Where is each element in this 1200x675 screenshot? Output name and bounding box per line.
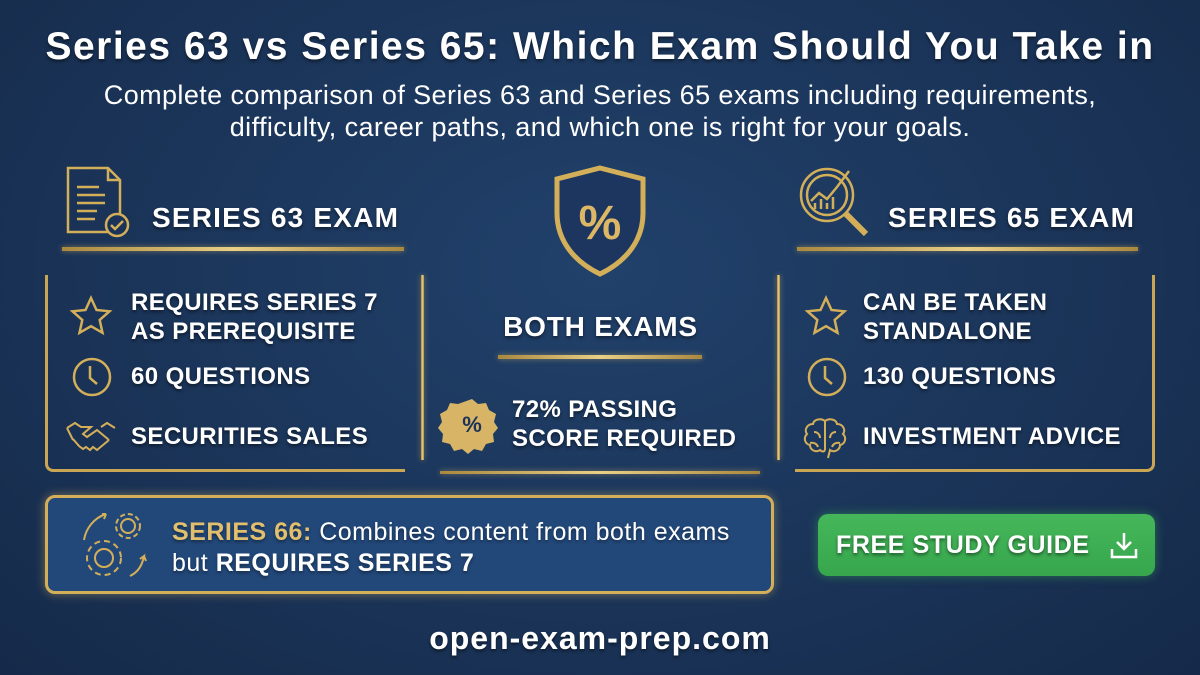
item: investment advice (804, 418, 1121, 458)
text: series 66 note: but REQUIRES SERIES 7 (172, 549, 474, 577)
panel: both exams (438, 165, 762, 478)
heading: series 65 exam: SERIES 65 EXAM (888, 202, 1135, 233)
icon: download (1110, 533, 1138, 558)
item: prerequisite: AS PREREQUISITE (131, 318, 356, 345)
item: standalone: CAN BE TAKEN (863, 289, 1047, 316)
icon: gears (83, 513, 147, 577)
item: 130 questions: 130 QUESTIONS (863, 363, 1056, 390)
panel: series 65 (774, 168, 1155, 472)
icon: document check (66, 166, 130, 238)
subtitle: Complete comparison of Series 63 and Series 65 exams including requirements, (104, 80, 1096, 110)
button: free study guide (818, 514, 1155, 576)
icon: shield percent (554, 165, 646, 277)
heading: series 63 exam: SERIES 63 EXAM (152, 202, 399, 233)
icon: shield percent: % (579, 197, 621, 250)
subtitle: difficulty, career paths, and which one is right for your goals. (230, 112, 970, 142)
item: prerequisite (70, 289, 378, 348)
panel: series 63 (45, 166, 428, 472)
button: free study guide: FREE STUDY GUIDE (836, 531, 1090, 559)
item: standalone (804, 289, 1047, 345)
title: Series 63 vs Series 65: Which Exam Should You Take in (45, 25, 1155, 68)
item: 130 questions (808, 358, 1056, 396)
item: 60 questions (72, 358, 311, 396)
item: 72% passing: SCORE REQUIRED (512, 425, 736, 452)
item: investment advice: INVESTMENT ADVICE (863, 423, 1121, 450)
text: series 66 note (172, 518, 730, 579)
heading: both exams: BOTH EXAMS (503, 311, 698, 342)
footer: url: open-exam-prep.com (429, 620, 771, 656)
item: 72% passing: % (462, 412, 482, 437)
callout: series 66 (45, 495, 774, 594)
text: series 66 note: SERIES 66: Combines content from both exams (172, 518, 730, 546)
item: securities sales: SECURITIES SALES (131, 423, 368, 450)
item: 72% passing (438, 396, 736, 454)
item: 72% passing: 72% PASSING (512, 396, 677, 423)
item: standalone: STANDALONE (863, 318, 1032, 345)
item: prerequisite: REQUIRES SERIES 7 (131, 289, 378, 316)
item: 60 questions: 60 QUESTIONS (131, 363, 311, 390)
subtitle (104, 80, 1096, 142)
icon: magnifier chart (800, 168, 868, 236)
